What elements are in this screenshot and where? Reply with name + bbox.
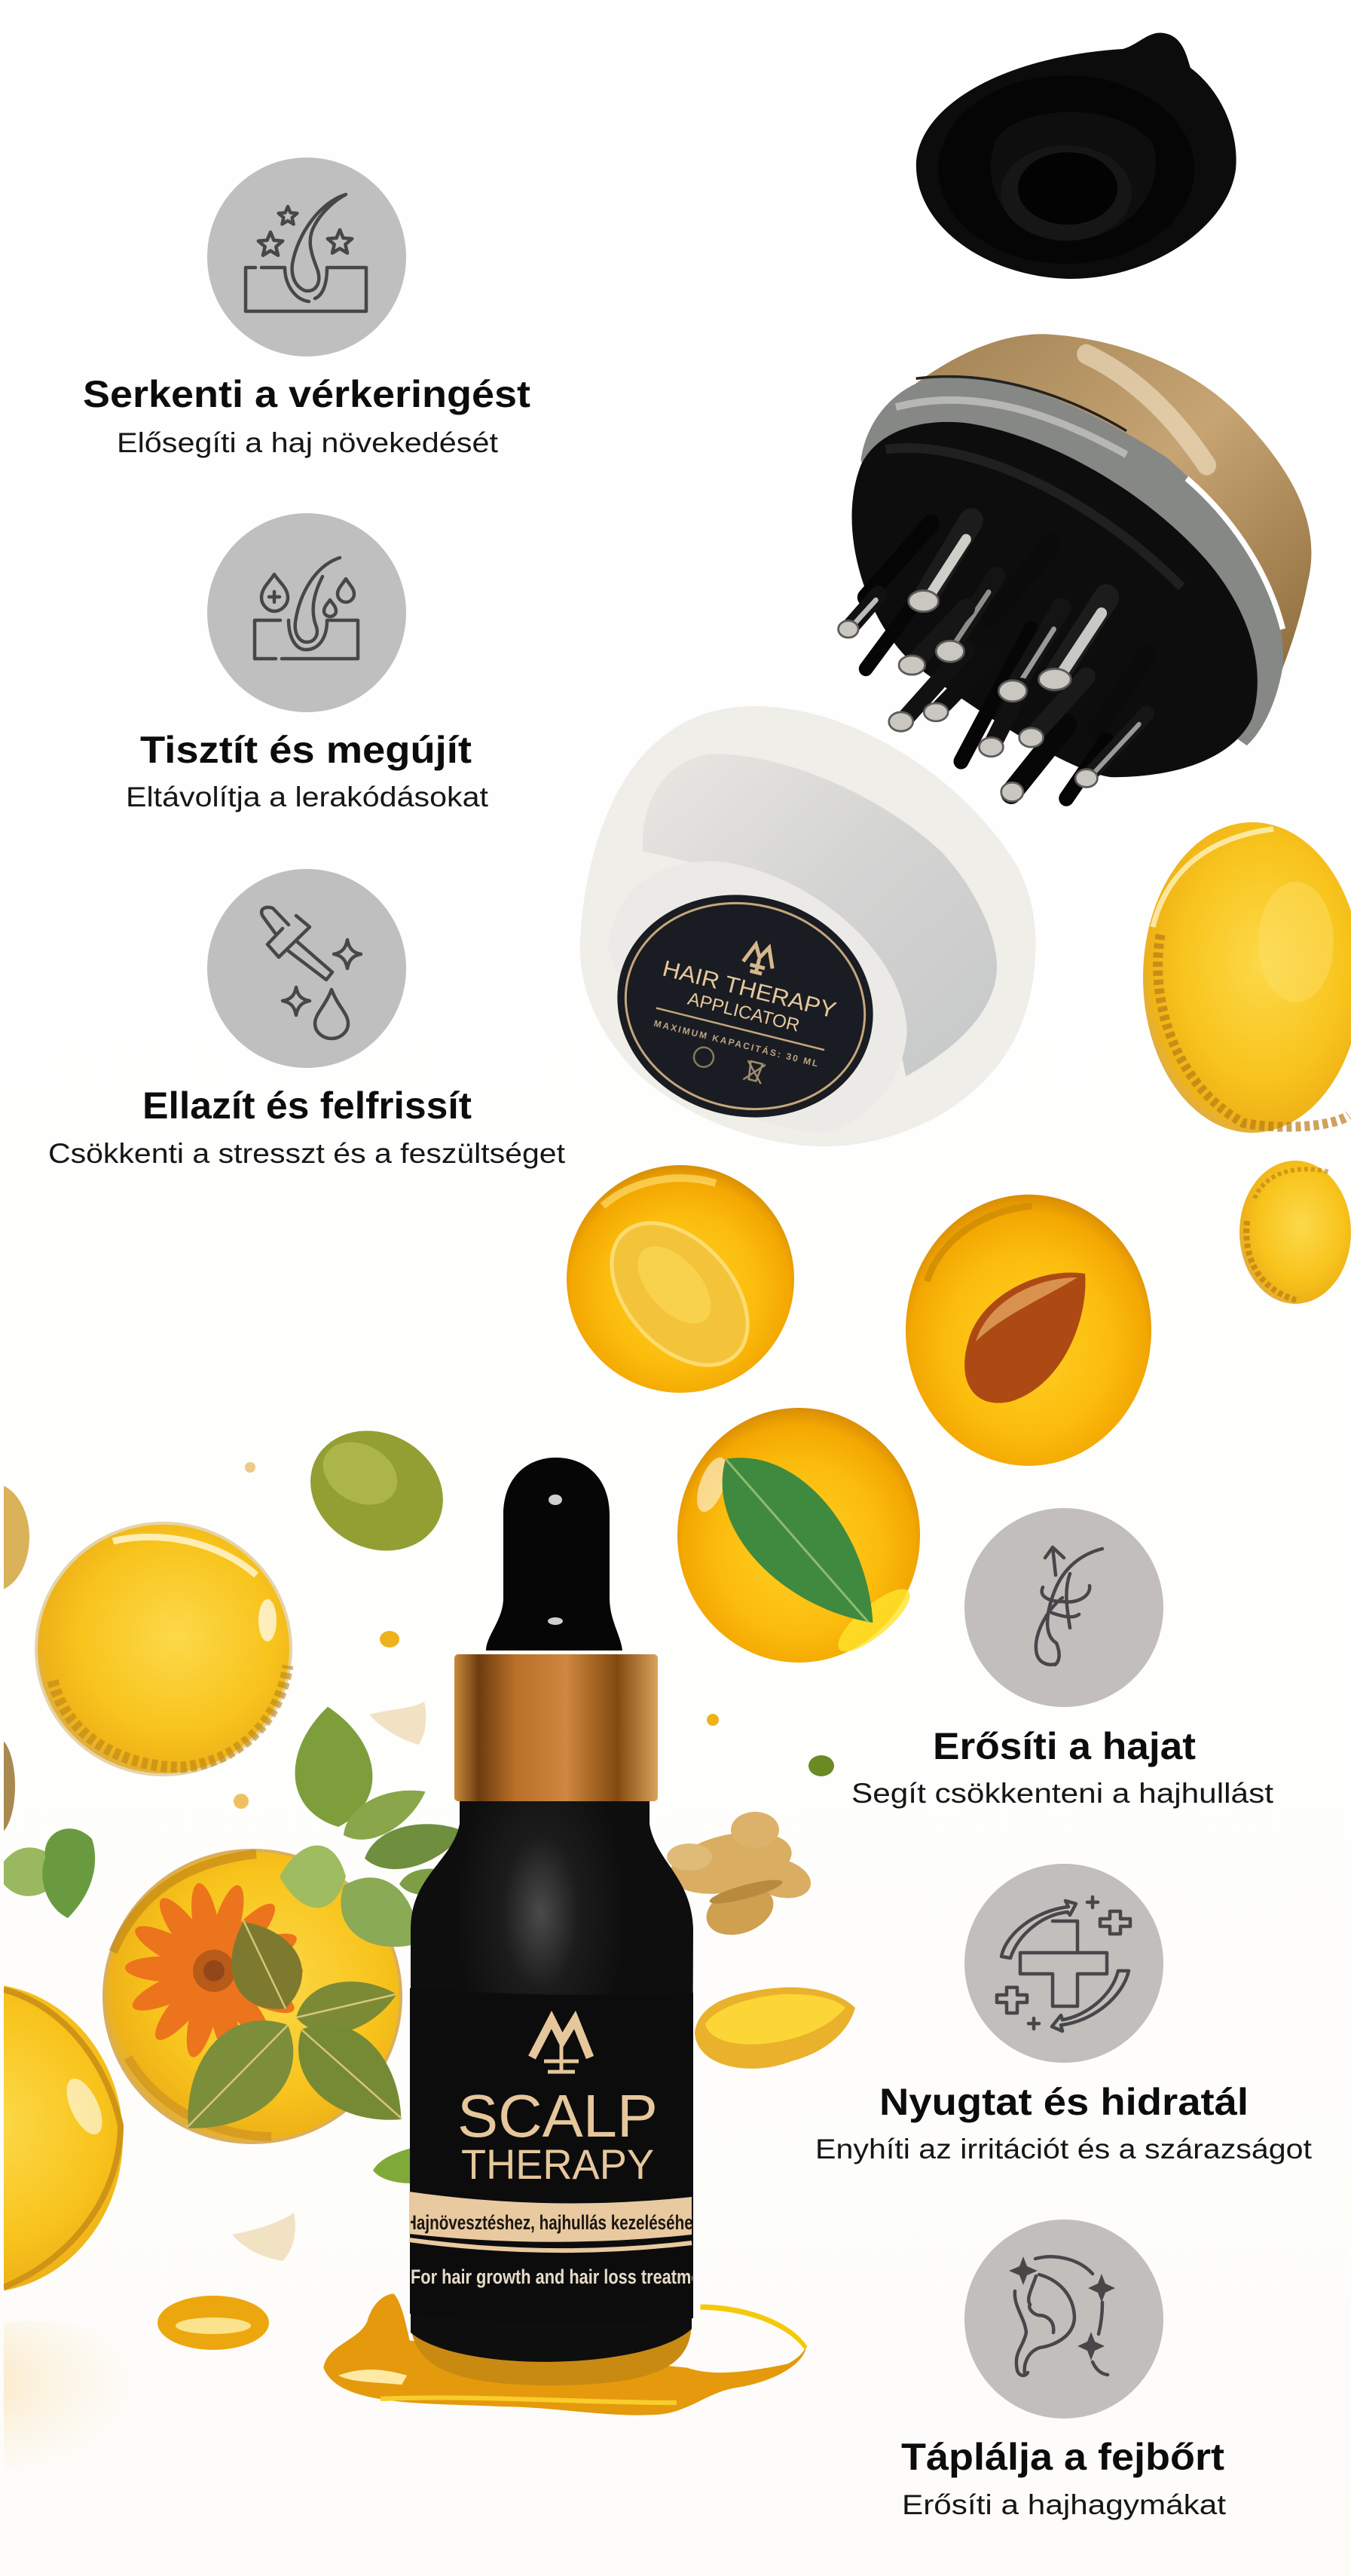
icon: hair follicle with drops: [207, 513, 406, 712]
applicator: frosted capsule: [580, 706, 1036, 1146]
subheading: Enyhíti az irritációt és a szárazságot: [815, 2134, 1313, 2165]
drop: ginger slice: [567, 1165, 794, 1393]
pin tips: [839, 591, 1097, 801]
band text: [411, 2214, 692, 2288]
bubble: large clear: [36, 1523, 291, 1775]
benefit: relaxing: [48, 869, 566, 1169]
clear rim: [860, 378, 1283, 745]
label: [405, 1988, 716, 2324]
benefit: nourishes scalp: [901, 2220, 1227, 2520]
heading: Erősíti a hajat: [933, 1725, 1196, 1767]
leaf behind bottle: [373, 2148, 411, 2183]
brand name: SCALP: [457, 2082, 658, 2149]
capsule shell: [580, 706, 1036, 1146]
icon: medical cross with arrows: [964, 1864, 1163, 2063]
soft glow lower left: [4, 2321, 102, 2458]
bubble: bottom left: [0, 1984, 123, 2293]
garlic petal upper: [369, 1702, 426, 1745]
leaves: branch over flower bubble: [159, 1703, 470, 2156]
band text: Hajnövesztéshez, hajhullás kezeléséhez: [405, 2211, 701, 2234]
product name: THERAPY: [461, 2140, 654, 2188]
bottle body: [411, 1801, 693, 2362]
drop: almond: [906, 1195, 1151, 1466]
english text: For hair growth and hair loss treatment: [411, 2265, 716, 2288]
oil drops upper right: [567, 822, 1351, 1663]
oil at bottle base: [411, 2325, 692, 2385]
tan band: [409, 2192, 692, 2242]
applicator: black rubber cap: [916, 32, 1236, 279]
garlic petal lower: [232, 2213, 295, 2261]
applicator: massager head with pins: [839, 334, 1311, 801]
panel: benefits right column: [815, 1508, 1313, 2520]
product bottle: [405, 1458, 716, 2385]
benefit: cleansing: [126, 513, 489, 812]
bubble: flower: [104, 1850, 401, 2143]
heading: Ellazít és felfrissít: [142, 1085, 472, 1127]
olive: small: [808, 1755, 834, 1776]
drop: green leaf: [677, 1408, 920, 1663]
ginger root: [667, 1812, 811, 1935]
icon: dropper with sparkles: [207, 869, 406, 1068]
subheading: Csökkenti a stresszt és a feszültséget: [48, 1138, 566, 1169]
copper collar: [454, 1654, 658, 1801]
logo: [532, 2020, 590, 2073]
heading: Táplálja a fejbőrt: [901, 2436, 1224, 2478]
subheading: Eltávolítja a lerakódásokat: [126, 782, 489, 812]
panel: benefits left column: [48, 158, 566, 1169]
subheading: Elősegíti a haj növekedését: [117, 427, 499, 458]
label logo: [741, 942, 777, 976]
heading: Nyugtat és hidratál: [879, 2081, 1249, 2123]
drop: small clear: [1239, 1161, 1351, 1304]
gold dome: [916, 334, 1311, 677]
benefit: blood circulation: [83, 158, 530, 458]
bubble: left edge middle: [4, 1741, 15, 1831]
leaves: left cluster: [4, 1828, 95, 1918]
pins: [848, 521, 1147, 798]
heading: Serkenti a vérkeringést: [83, 373, 530, 415]
tiny droplets: [234, 1462, 719, 1809]
label: APPLICATOR: [686, 989, 802, 1036]
icon: woman's head with sparkles: [964, 2220, 1163, 2418]
drop: large clear: [1143, 822, 1351, 1133]
icon: hair follicle with stars: [207, 158, 406, 356]
subheading: Segít csökkenteni a hajhullást: [851, 1778, 1274, 1809]
benefit: soothes and hydrates: [815, 1864, 1313, 2165]
benefit: strengthens hair: [851, 1508, 1274, 1809]
heading: Tisztít és megújít: [140, 729, 472, 771]
bubble: left edge upper: [4, 1486, 29, 1589]
olive: [310, 1430, 443, 1551]
icon: hair strands with arrow: [964, 1508, 1163, 1707]
flower: [124, 1881, 303, 2060]
oil puddle: [323, 2294, 806, 2415]
label: HAIR THERAPY: [660, 956, 839, 1023]
oil drop: small flat: [157, 2296, 269, 2350]
subheading: Erősíti a hajhagymákat: [902, 2489, 1227, 2520]
black base: [852, 422, 1258, 777]
label: MAXIMUM KAPACITÁS: 30 ML: [653, 1017, 819, 1069]
dropper bulb: [486, 1458, 622, 1651]
ingredients scene: [0, 1408, 855, 2472]
label: [594, 868, 897, 1144]
ginger slice: [695, 1987, 855, 2069]
